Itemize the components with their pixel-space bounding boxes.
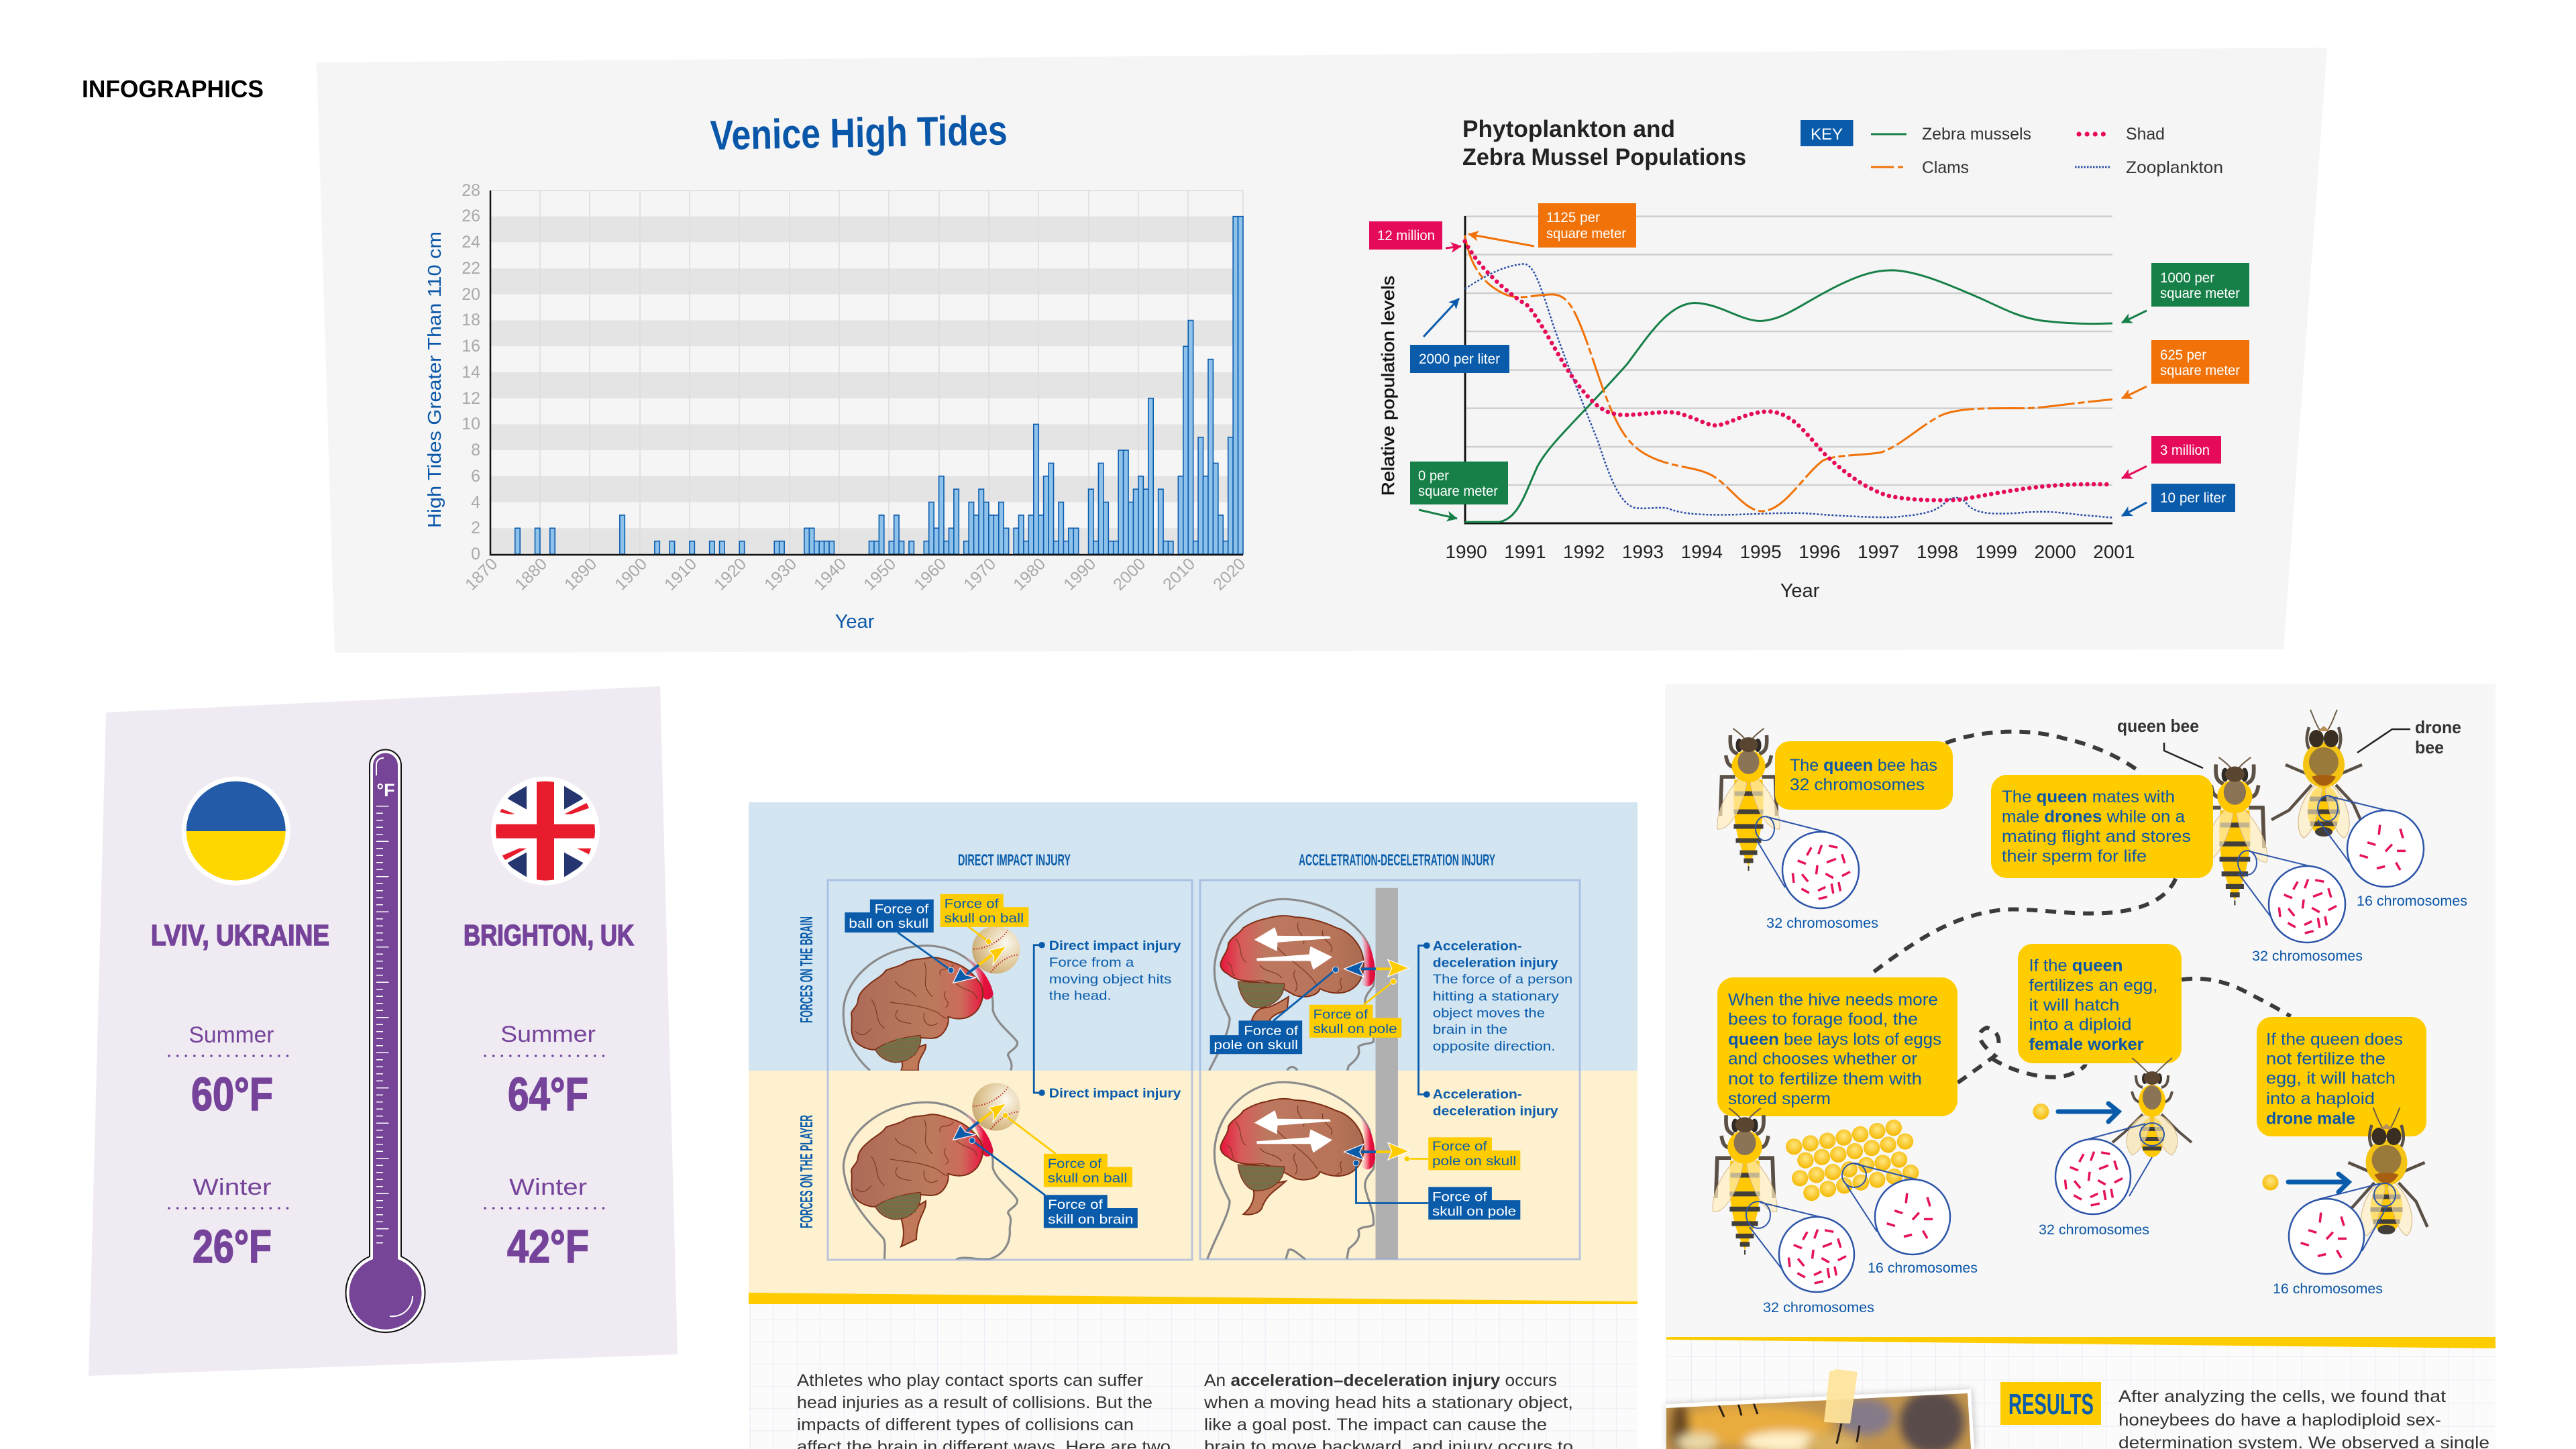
egg and arrow: fertilized [2033, 1104, 2118, 1122]
text box: queen has 32 chromosomes [1775, 741, 1953, 810]
text box: hive needs: When the hive needs more [1728, 990, 1938, 1009]
divider bar [749, 1293, 1638, 1304]
text box: fertilizes: it will hatch [2029, 996, 2120, 1015]
text: head injury body right: when a moving head hits a stationary object, [1203, 1393, 1573, 1412]
label: force of pole on skull [1210, 1020, 1302, 1054]
dashed flow paths [1869, 732, 2291, 1083]
text box: hive needs [1717, 977, 1957, 1116]
label: force of skull on ball [941, 894, 1028, 927]
label: 16 chromosomes: 16 chromosomes [2273, 1281, 2383, 1297]
text: Lviv: 60°F [191, 1068, 273, 1120]
year labels: 1997 [1858, 541, 1899, 562]
callout text: acceleration-deceleration: hitting a stationary [1433, 989, 1559, 1004]
callouts: 1000 per [2160, 270, 2214, 286]
chart title [1462, 116, 1746, 170]
lower head and brain [843, 1102, 1017, 1259]
side label: forces on the brain: FORCES ON THE BRAIN [796, 916, 816, 1023]
y axis labels: 14 [462, 363, 480, 382]
panel: head injury [749, 802, 1638, 1449]
year labels: 2000 [2034, 541, 2076, 562]
callout text: direct impact injury: Force from a [1049, 955, 1134, 970]
callout arrows [1419, 234, 2147, 519]
text: Brighton: Winter [509, 1175, 587, 1200]
callout text: direct impact injury: the head. [1049, 989, 1112, 1004]
divider bar [1666, 1337, 2496, 1348]
x axis labels: 1930 [761, 554, 800, 594]
bee: queen 1 [1717, 729, 1780, 871]
text: results body: After analyzing the cells, we found that [2118, 1387, 2446, 1406]
callouts: square meter [2160, 286, 2240, 301]
x axis title: Year [1780, 580, 1820, 602]
x axis labels: 1980 [1010, 554, 1049, 594]
label: force of skull on pole: Force of [1313, 1008, 1368, 1022]
label: force of skull on ball lower: skull on ball [1048, 1171, 1127, 1186]
label: force of skull on pole lower: Force of [1432, 1190, 1487, 1204]
y axis labels: 26 [462, 207, 480, 225]
callout text: acceleration-deceleration: brain in the [1433, 1022, 1507, 1037]
x axis labels: 1960 [910, 554, 950, 594]
text: Lviv: 26°F [193, 1220, 272, 1273]
label: 32 chromosomes: 32 chromosomes [2039, 1222, 2149, 1238]
label: queen bee: queen bee [2117, 716, 2199, 736]
bee: drone 2 [2334, 1108, 2427, 1236]
bee: queen 3 [1713, 1108, 1777, 1254]
text box: fertilizes: female worker [2029, 1035, 2144, 1054]
callout text: acceleration-deceleration: The force of a person [1433, 972, 1572, 987]
legend: Shad [2126, 125, 2165, 144]
series: zooplankton [1465, 264, 2112, 518]
callout text: acceleration-deceleration: deceleration injury [1433, 1104, 1559, 1119]
bee: drone 1 [2271, 710, 2365, 838]
chart title: Phytoplankton and [1462, 116, 1675, 142]
text: Brighton [464, 919, 634, 1273]
text: Lviv [151, 919, 329, 1273]
photo: honeybees on comb [1666, 1389, 1976, 1449]
text box: not fertilize: drone male [2266, 1109, 2355, 1128]
year labels: 1991 [1504, 541, 1546, 562]
x axis labels: 1900 [611, 554, 651, 594]
tape [1824, 1369, 1858, 1424]
legend: KEY [1811, 125, 1843, 144]
callout text: direct impact injury: moving object hits [1049, 972, 1172, 987]
text box: queen mates: male drones while on a [2002, 808, 2185, 826]
legend: Zooplankton [2126, 158, 2223, 177]
paper section with grid [749, 1304, 1638, 1449]
year labels: 1996 [1799, 541, 1841, 562]
legend [1801, 120, 2223, 177]
eggs cluster [1786, 1120, 1919, 1201]
label: force of ball on skull [845, 900, 934, 932]
magnifier: drone 16 chromosomes [2318, 796, 2424, 887]
label: force of skull on ball lower [1044, 1154, 1132, 1187]
text: results body: honeybees do have a haplodiploid sex- [2118, 1411, 2441, 1430]
panel: charts backdrop [317, 48, 2327, 653]
callouts: 1125 per [1546, 210, 1600, 225]
text: head injury body left: impacts of different types of collisions can [797, 1415, 1134, 1434]
text box: fertilizes [2018, 944, 2182, 1063]
chart: Venice High Tides [424, 107, 1249, 633]
callout text: acceleration-deceleration: Acceleration- [1433, 939, 1522, 954]
magnifier: mated queen 32 chromosomes [2238, 851, 2345, 943]
chart: Phytoplankton and Zebra Mussel Populations [1369, 116, 2249, 602]
year labels: 1995 [1739, 541, 1782, 562]
series: zebra mussels [1465, 270, 2112, 522]
callout text: acceleration-deceleration [1433, 939, 1572, 1119]
label: force of pole on skull: pole on skull [1214, 1038, 1298, 1053]
x axis labels: 1970 [960, 554, 1000, 594]
line series [1465, 235, 2112, 522]
callouts: 3 million [2160, 443, 2210, 458]
y axis labels: 24 [462, 233, 480, 252]
text: Lviv: LVIV, UKRAINE [151, 919, 329, 952]
label: force of skull on ball: skull on ball [945, 911, 1024, 926]
callouts: 625 per [2160, 347, 2206, 363]
label: force of pole on skull: Force of [1244, 1024, 1298, 1038]
year labels: 1990 [1445, 541, 1487, 562]
text: head injury body right [1203, 1371, 1573, 1449]
baseball upper [972, 926, 1020, 973]
paper section with grid [1666, 1338, 2496, 1449]
icon: Ukraine flag [181, 777, 292, 885]
y axis labels: 6 [471, 467, 480, 486]
label: queen bee [2117, 716, 2203, 768]
text box: fertilizes: fertilizes an egg, [2029, 976, 2157, 995]
y axis title: High Tides Greater Than 110 cm [424, 231, 445, 528]
y axis labels: 2 [471, 519, 480, 537]
text box: queen has 32 chromosomes: 32 chromosomes [1790, 775, 1925, 794]
label: drone bee: drone [2415, 717, 2461, 737]
icon: thermometer: °F [376, 780, 395, 800]
magnifier: drone 2 16 chromosomes [2289, 1183, 2396, 1274]
label: force of ball on skull: Force of [875, 902, 929, 916]
text box: not fertilize: egg, it will hatch [2266, 1069, 2396, 1088]
chart title: Venice High Tides [710, 107, 1008, 159]
text box: hive needs: not to fertilize them with [1728, 1070, 1922, 1089]
magnifier: egg 16 chromosomes [1842, 1163, 1950, 1254]
text: results body [2118, 1387, 2489, 1449]
label: force of skill on brain [1044, 1195, 1138, 1228]
text: head injury body left: head injuries as a result of collisions. But the [797, 1393, 1152, 1412]
text box: queen mates: their sperm for life [2002, 847, 2147, 865]
x axis labels: 1880 [511, 554, 551, 594]
x axis labels: 1950 [860, 554, 900, 594]
label: force of pole on skull lower [1428, 1137, 1520, 1170]
text: head injury body right: like a goal post. The impact can cause the [1204, 1415, 1547, 1434]
y axis labels: 12 [462, 389, 480, 408]
callout text: direct impact injury [1049, 938, 1181, 1101]
x axis title: Year [835, 611, 875, 633]
panel: temperatures Lviv vs Brighton [89, 686, 678, 1376]
callouts: 12 million [1377, 228, 1435, 244]
diagram: acceleration-deceleration injury [1208, 888, 1572, 1259]
label: 32 chromosomes: 32 chromosomes [1766, 916, 1878, 931]
lower head and brain [1208, 1082, 1409, 1259]
text box: hive needs: stored sperm [1728, 1089, 1831, 1108]
x axis labels: 2020 [1210, 554, 1249, 594]
bee: queen 2 [2202, 757, 2267, 905]
x axis labels: 1890 [561, 554, 600, 594]
y axis title: Relative population levels [1378, 276, 1398, 496]
text: head injury body left [797, 1371, 1171, 1449]
x axis labels: 1940 [810, 554, 850, 594]
chart title: Zebra Mussel Populations [1462, 144, 1746, 170]
label: 32 chromosomes: 32 chromosomes [1763, 1300, 1874, 1316]
y axis labels: 18 [462, 311, 480, 329]
y axis labels: 0 [471, 545, 480, 564]
callout text: acceleration-deceleration: opposite direction. [1433, 1039, 1556, 1054]
year labels [1445, 541, 2135, 562]
label: force of skull on ball lower: Force of [1048, 1157, 1102, 1171]
y axis labels: 10 [462, 415, 480, 433]
x axis labels: 2010 [1159, 554, 1199, 594]
text: Brighton: BRIGHTON, UK [464, 919, 634, 952]
callouts: square meter [1546, 226, 1626, 241]
diagram: direct impact injury [843, 894, 1181, 1259]
text: Lviv: Summer [189, 1022, 274, 1048]
page label: INFOGRAPHICS: INFOGRAPHICS [82, 75, 264, 103]
text box: queen mates: The queen mates with [2002, 788, 2175, 806]
magnifier: queen 3 [1746, 1201, 1854, 1292]
bars: high tides per year [515, 217, 1243, 554]
side label: forces on the player: FORCES ON THE PLAYER [796, 1115, 816, 1228]
y axis labels: 20 [462, 285, 480, 304]
bracket [1419, 946, 1427, 1094]
upper head and brain [1209, 899, 1409, 1071]
icon: thermometer [346, 749, 425, 1332]
year labels: 1994 [1681, 541, 1723, 562]
year labels: 1999 [1976, 541, 2017, 562]
upper head and brain [843, 946, 1017, 1071]
horizontal bands [490, 217, 1243, 554]
label: drone bee [2357, 717, 2461, 757]
text box: not fertilize: If the queen does [2266, 1030, 2403, 1049]
callout text: acceleration-deceleration: Acceleration- [1433, 1087, 1522, 1102]
text box: not fertilize [2257, 1017, 2426, 1136]
x axis labels: 1870 [462, 554, 501, 594]
legend: Clams [1922, 158, 1969, 177]
text box: queen has 32 chromosomes: The queen bee has [1790, 756, 1937, 775]
text box: queen mates [1991, 775, 2213, 878]
text box: queen mates: mating flight and stores [2002, 827, 2191, 846]
text box: fertilizes: If the queen [2029, 957, 2123, 975]
text: Brighton: 64°F [508, 1068, 588, 1120]
panel: honeybee sex determination [1665, 684, 2496, 1449]
heading: direct impact injury: DIRECT IMPACT INJURY [958, 851, 1071, 869]
callouts: square meter [2160, 363, 2240, 378]
label: force of ball on skull: ball on skull [849, 916, 928, 931]
year labels: 1993 [1622, 541, 1664, 562]
label: force of pole on skull lower: pole on skull [1432, 1154, 1516, 1169]
label: force of skill on brain: Force of [1048, 1197, 1103, 1212]
text: Lviv: Winter [193, 1175, 271, 1200]
callouts: 2000 per liter [1419, 352, 1500, 367]
label: force of skull on pole lower [1428, 1187, 1520, 1220]
icon: UK flag [491, 777, 600, 885]
text box: hive needs: bees to forage food, the [1728, 1010, 1918, 1029]
text box: hive needs: and chooses whether or [1728, 1050, 1917, 1069]
magnifier: worker 32 chromosomes [2055, 1123, 2164, 1214]
egg and arrow: unfertilized [2262, 1174, 2349, 1192]
callouts: square meter [1418, 484, 1498, 499]
text: head injury body left: Athletes who play contact sports can suffer [797, 1371, 1143, 1390]
label: force of skull on pole: skull on pole [1313, 1022, 1397, 1036]
x axis labels: 1920 [710, 554, 750, 594]
callout text: acceleration-deceleration: object moves the [1433, 1006, 1545, 1020]
magnifier: queen 32 chromosomes [1756, 816, 1859, 908]
bracket [1034, 945, 1042, 1093]
label: 16 chromosomes: 16 chromosomes [1868, 1260, 1978, 1276]
bee: worker [2112, 1058, 2192, 1157]
legend: Zebra mussels [1922, 125, 2031, 144]
x axis labels: 1990 [1060, 554, 1099, 594]
baseball lower [953, 1083, 1020, 1140]
label: 32 chromosomes: 32 chromosomes [2252, 949, 2363, 964]
y axis labels: 22 [462, 259, 480, 278]
label: force of pole on skull lower: Force of [1432, 1139, 1487, 1154]
y axis labels [462, 181, 480, 564]
text: head injury body right: An acceleration–deceleration injury occurs [1204, 1371, 1557, 1390]
y axis labels: 16 [462, 337, 480, 356]
x axis labels: 2000 [1110, 554, 1149, 594]
label: force of skull on ball: Force of [945, 896, 999, 911]
callouts: 0 per [1418, 468, 1449, 484]
heading: acceleration-deceleration injury: ACCELETRATION-DECELETRATION INJURY [1299, 851, 1495, 869]
diagram frames [828, 880, 1580, 1260]
callout text: acceleration-deceleration: deceleration injury [1433, 956, 1559, 970]
text: Brighton: 42°F [507, 1220, 589, 1273]
callouts: 10 per liter [2160, 490, 2226, 506]
label: force of skill on brain: skill on brain [1048, 1212, 1134, 1227]
callouts [1369, 203, 2249, 512]
callout text: direct impact injury: Direct impact injury [1049, 938, 1181, 953]
y axis labels: 28 [462, 181, 480, 200]
label: drone bee: bee [2415, 737, 2444, 757]
callout text: direct impact injury: Direct impact injury [1049, 1086, 1181, 1101]
label: force of skull on pole [1309, 1005, 1401, 1038]
year labels: 1998 [1917, 541, 1958, 562]
year labels: 1992 [1563, 541, 1605, 562]
text box: fertilizes: into a diploid [2029, 1016, 2132, 1034]
series: shad [1465, 241, 2112, 500]
heading: results [2000, 1382, 2101, 1425]
x axis labels [462, 554, 1249, 594]
text box: not fertilize: into a haploid [2266, 1089, 2375, 1108]
text: Brighton: Summer [500, 1022, 596, 1047]
y axis labels: 4 [471, 493, 480, 512]
goal post [1376, 888, 1398, 1259]
series: clams [1465, 235, 2112, 511]
text box: not fertilize: not fertilize the [2266, 1050, 2385, 1069]
label: 16 chromosomes: 16 chromosomes [2357, 894, 2467, 909]
y axis labels: 8 [471, 441, 480, 460]
text box: hive needs: queen bee lays lots of eggs [1728, 1030, 1941, 1049]
x axis labels: 1910 [661, 554, 700, 594]
label: force of skull on pole lower: skull on pole [1432, 1204, 1516, 1219]
year labels: 2001 [2093, 541, 2135, 562]
heading: results: RESULTS [2008, 1388, 2094, 1421]
